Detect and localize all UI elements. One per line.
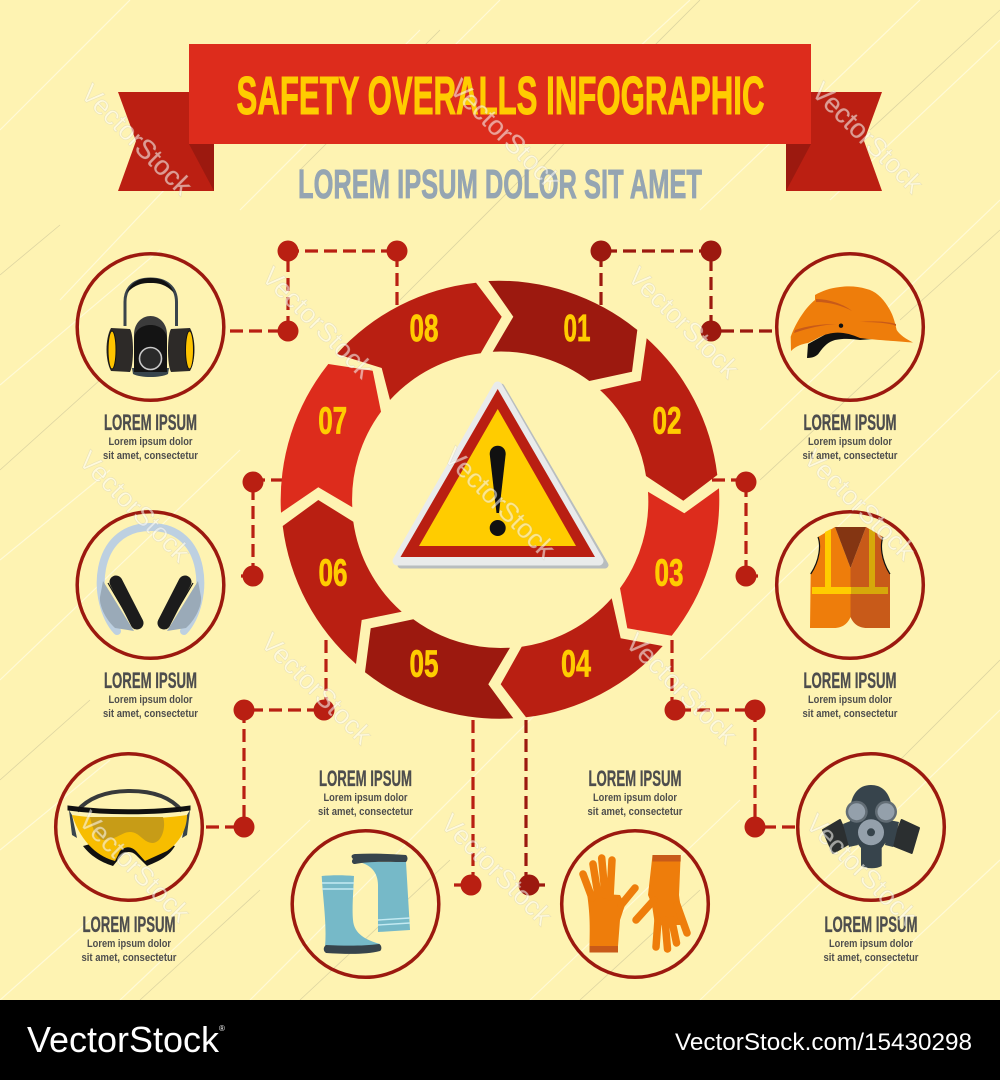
watermarks: VectorStock bbox=[620, 627, 743, 751]
heading: LOREM IPSUM bbox=[104, 410, 197, 435]
connector: step 07 to earmuffs bbox=[241, 472, 284, 586]
icon: gas mask bbox=[823, 785, 919, 868]
ring of eight arrows bbox=[281, 281, 719, 719]
body text: Lorem ipsum dolor bbox=[324, 792, 408, 804]
arrow 06 bbox=[283, 500, 402, 664]
panel: ear protection bbox=[77, 512, 224, 720]
watermarks: VectorStock bbox=[806, 76, 929, 200]
banner face bbox=[189, 44, 811, 144]
heading: LOREM IPSUM bbox=[319, 766, 412, 791]
connector: step 04 to gloves bbox=[518, 720, 548, 896]
arrow 03: 03 bbox=[654, 553, 684, 595]
body text bbox=[824, 938, 919, 964]
body text: Lorem ipsum dolor bbox=[593, 792, 678, 804]
panel: gas mask bbox=[798, 754, 944, 964]
body text: sit amet, consectetur bbox=[103, 450, 199, 462]
panel: goggles bbox=[56, 754, 202, 964]
arrow 06: 06 bbox=[318, 553, 348, 595]
arrow 03 bbox=[620, 488, 719, 636]
panel: safety vest bbox=[777, 512, 923, 720]
arrow 08: 08 bbox=[410, 308, 438, 350]
heading: LOREM IPSUM bbox=[804, 668, 896, 693]
arrow 04: 04 bbox=[561, 644, 591, 686]
body text bbox=[318, 792, 414, 818]
body text: sit amet, consectetur bbox=[103, 708, 199, 720]
heading: LOREM IPSUM bbox=[588, 766, 682, 791]
watermarks: VectorStock bbox=[256, 261, 379, 385]
body text: Lorem ipsum dolor bbox=[87, 938, 172, 950]
watermarks: VectorStock bbox=[798, 443, 921, 567]
watermarks: VectorStock bbox=[800, 808, 923, 932]
heading: LOREM IPSUM bbox=[104, 668, 197, 693]
watermarks: VectorStock bbox=[444, 73, 567, 197]
arrow 05 bbox=[365, 619, 513, 719]
body text: Lorem ipsum dolor bbox=[108, 694, 193, 706]
left ribbon tail bbox=[118, 92, 214, 191]
body text bbox=[588, 792, 683, 818]
icon: respirator bbox=[106, 278, 194, 377]
panel: hard hat bbox=[777, 254, 923, 462]
warning triangle bbox=[397, 386, 605, 565]
watermarks: VectorStock bbox=[73, 805, 196, 929]
banner bbox=[118, 44, 882, 191]
body text: sit amet, consectetur bbox=[318, 806, 414, 818]
connector: step 01 to helmet bbox=[590, 240, 772, 342]
body text: sit amet, consectetur bbox=[588, 806, 683, 818]
icon: earmuffs bbox=[100, 527, 201, 631]
subtitle: LOREM IPSUM DOLOR SIT AMET bbox=[298, 161, 702, 207]
arrow 02: 02 bbox=[652, 400, 682, 442]
icon: hard hat bbox=[791, 286, 913, 358]
footer url: VectorStock.com/15430298 bbox=[675, 1029, 972, 1056]
arrow 07 bbox=[281, 364, 381, 513]
right ribbon fold bbox=[786, 144, 811, 191]
watermarks bbox=[73, 73, 929, 932]
connector: step 08 to mask bbox=[230, 240, 408, 342]
body text: Lorem ipsum dolor bbox=[808, 436, 893, 448]
body text bbox=[103, 694, 199, 720]
icon: boots bbox=[322, 854, 410, 954]
panel: respirator mask bbox=[77, 254, 224, 462]
body text: sit amet, consectetur bbox=[82, 952, 177, 964]
arrow 01 bbox=[488, 281, 637, 381]
arrow 05: 05 bbox=[410, 644, 438, 686]
body text: sit amet, consectetur bbox=[824, 952, 919, 964]
panel: rubber boots bbox=[292, 766, 439, 977]
watermarks: VectorStock bbox=[435, 808, 558, 932]
heading: LOREM IPSUM bbox=[824, 912, 918, 937]
watermarks: VectorStock bbox=[75, 78, 198, 202]
arrow 01: 01 bbox=[564, 308, 590, 350]
body text: Lorem ipsum dolor bbox=[808, 694, 893, 706]
body text: sit amet, consectetur bbox=[802, 450, 898, 462]
connector: step 03 to gas mask bbox=[664, 640, 795, 838]
arrow 02 bbox=[600, 338, 717, 501]
arrow 08 bbox=[337, 283, 502, 400]
footer brand: VectorStock bbox=[27, 1019, 220, 1060]
footer registered mark: ® bbox=[219, 1024, 225, 1033]
connector: step 06 to goggles bbox=[206, 640, 334, 838]
arrow 04 bbox=[501, 598, 663, 717]
heading: LOREM IPSUM bbox=[82, 912, 176, 937]
left ribbon fold bbox=[189, 144, 214, 191]
body text bbox=[802, 436, 898, 462]
body text: sit amet, consectetur bbox=[802, 708, 898, 720]
watermarks: VectorStock bbox=[622, 261, 745, 385]
watermarks: VectorStock bbox=[73, 445, 196, 569]
body text bbox=[802, 694, 898, 720]
arrow 07: 07 bbox=[318, 400, 347, 442]
heading: LOREM IPSUM bbox=[804, 410, 896, 435]
connector: step 02 to vest bbox=[712, 472, 758, 586]
watermarks: VectorStock bbox=[255, 627, 378, 751]
footer bar bbox=[0, 1000, 1000, 1080]
connector: step 05 to boots bbox=[452, 720, 482, 896]
body text bbox=[82, 938, 177, 964]
right ribbon tail bbox=[786, 92, 882, 191]
icon: vest bbox=[810, 527, 890, 628]
body text: Lorem ipsum dolor bbox=[108, 436, 193, 448]
panel: gloves bbox=[562, 766, 708, 977]
body text bbox=[103, 436, 199, 462]
icon: goggles bbox=[68, 791, 190, 866]
watermarks: VectorStock bbox=[438, 441, 561, 565]
body text: Lorem ipsum dolor bbox=[829, 938, 914, 950]
icon: gloves bbox=[583, 855, 687, 952]
